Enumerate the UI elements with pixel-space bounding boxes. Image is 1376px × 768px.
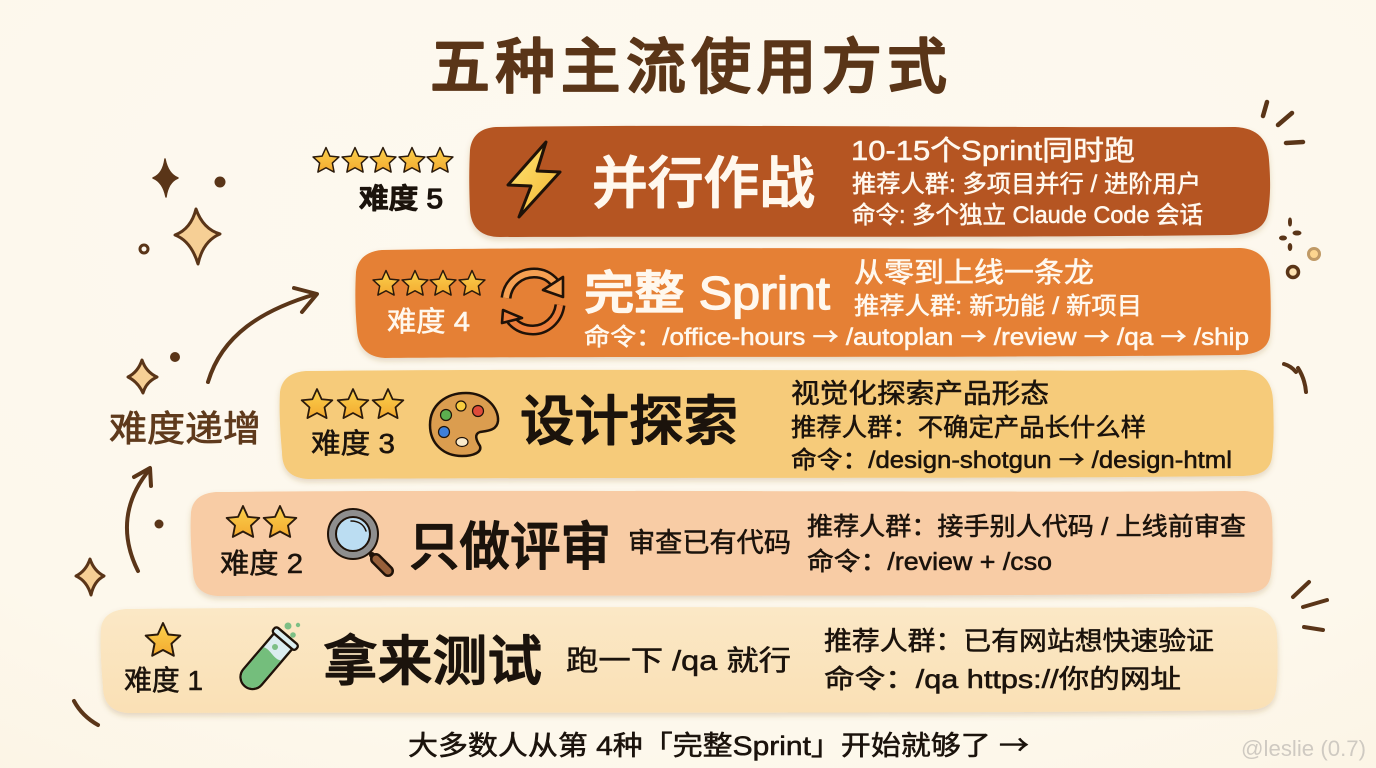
details: level 3: 推荐人群：不确定产品长什么样: [791, 414, 1146, 442]
subtitle: review existing code: 审查已有代码: [628, 528, 791, 558]
difficulty 2 label: 难度 2: [220, 548, 303, 579]
difficulty 3 stars: [302, 389, 403, 418]
arrow: upper difficulty curve: [208, 288, 317, 382]
panel: level 2 review only: [191, 491, 1273, 596]
heading: design exploration: 设计探索: [520, 392, 738, 452]
difficulty 2 stars: [227, 506, 296, 537]
icon: lightning bolt: [508, 142, 560, 217]
details: level 5: 10-15个Sprint同时跑: [851, 135, 1135, 166]
icon: magnifier: [332, 513, 388, 571]
details: level 1: 命令：/qa https://你的网址: [824, 664, 1181, 694]
panel: level 1 just test: [101, 607, 1278, 713]
arrow: lower difficulty curve: [127, 468, 151, 571]
details: level 3: 命令：/design-shotgun → /design-html: [791, 440, 1232, 475]
difficulty 3 label: 难度 3: [311, 428, 395, 459]
details: level 5: [851, 135, 1203, 229]
label: difficulty increasing: 难度递增: [109, 408, 261, 449]
difficulty 4 label: 难度 4: [387, 306, 470, 337]
icon: test tube: [233, 622, 300, 696]
heading: full sprint: 完整 Sprint: [584, 267, 830, 319]
difficulty 5 label: 难度 5: [359, 183, 443, 214]
details: level 1: [824, 626, 1214, 694]
heading: just test: 拿来测试: [323, 632, 542, 692]
heading: review only: 只做评审: [409, 519, 611, 577]
subtitle: run qa: 跑一下 /qa 就行: [566, 645, 791, 676]
decoration: left sparkles: [74, 159, 226, 725]
panel: level 4 full sprint: [355, 248, 1271, 358]
details: level 4: 从零到上线一条龙: [854, 257, 1094, 288]
details: level 4: [584, 257, 1249, 352]
bar 4 background: [355, 248, 1271, 358]
difficulty 1 label: 难度 1: [124, 665, 203, 696]
details: level 2: 命令：/review + /cso: [807, 548, 1052, 576]
bar 5 background: [469, 126, 1270, 237]
details: level 2: 推荐人群：接手别人代码 / 上线前审查: [807, 513, 1246, 541]
panel: level 3 design exploration: [280, 370, 1274, 479]
panel: level 5 parallel: [313, 126, 1270, 237]
footer note: 大多数人从第 4种「完整Sprint」开始就够了 →: [408, 724, 1029, 763]
watermark: @leslie (0.7): [1241, 736, 1366, 761]
details: level 1: 推荐人群：已有网站想快速验证: [824, 626, 1214, 656]
icon: palette: [430, 393, 498, 456]
difficulty 1 star: [146, 623, 180, 656]
details: level 5: 命令: 多个独立 Claude Code 会话: [852, 202, 1203, 229]
decoration: right ticks and dots: [1263, 102, 1327, 630]
details: level 4: 命令：/office-hours → /autoplan → /review → /qa → /ship: [584, 317, 1249, 352]
details: level 2: [807, 513, 1246, 576]
heading: parallel: 并行作战: [592, 152, 815, 215]
details: level 3: [791, 379, 1232, 475]
difficulty 4 stars: [373, 270, 485, 295]
bar 2 background: [191, 491, 1273, 596]
title: 五种主流使用方式: [430, 34, 947, 101]
bar 1 background: [101, 607, 1278, 713]
details: level 3: 视觉化探索产品形态: [791, 379, 1049, 409]
bar 3 background: [280, 370, 1274, 479]
icon: cycle arrows: [502, 273, 563, 330]
details: level 5: 推荐人群: 多项目并行 / 进阶用户: [852, 171, 1201, 198]
details: level 4: 推荐人群: 新功能 / 新项目: [854, 293, 1142, 320]
difficulty 5 stars: [313, 148, 453, 172]
